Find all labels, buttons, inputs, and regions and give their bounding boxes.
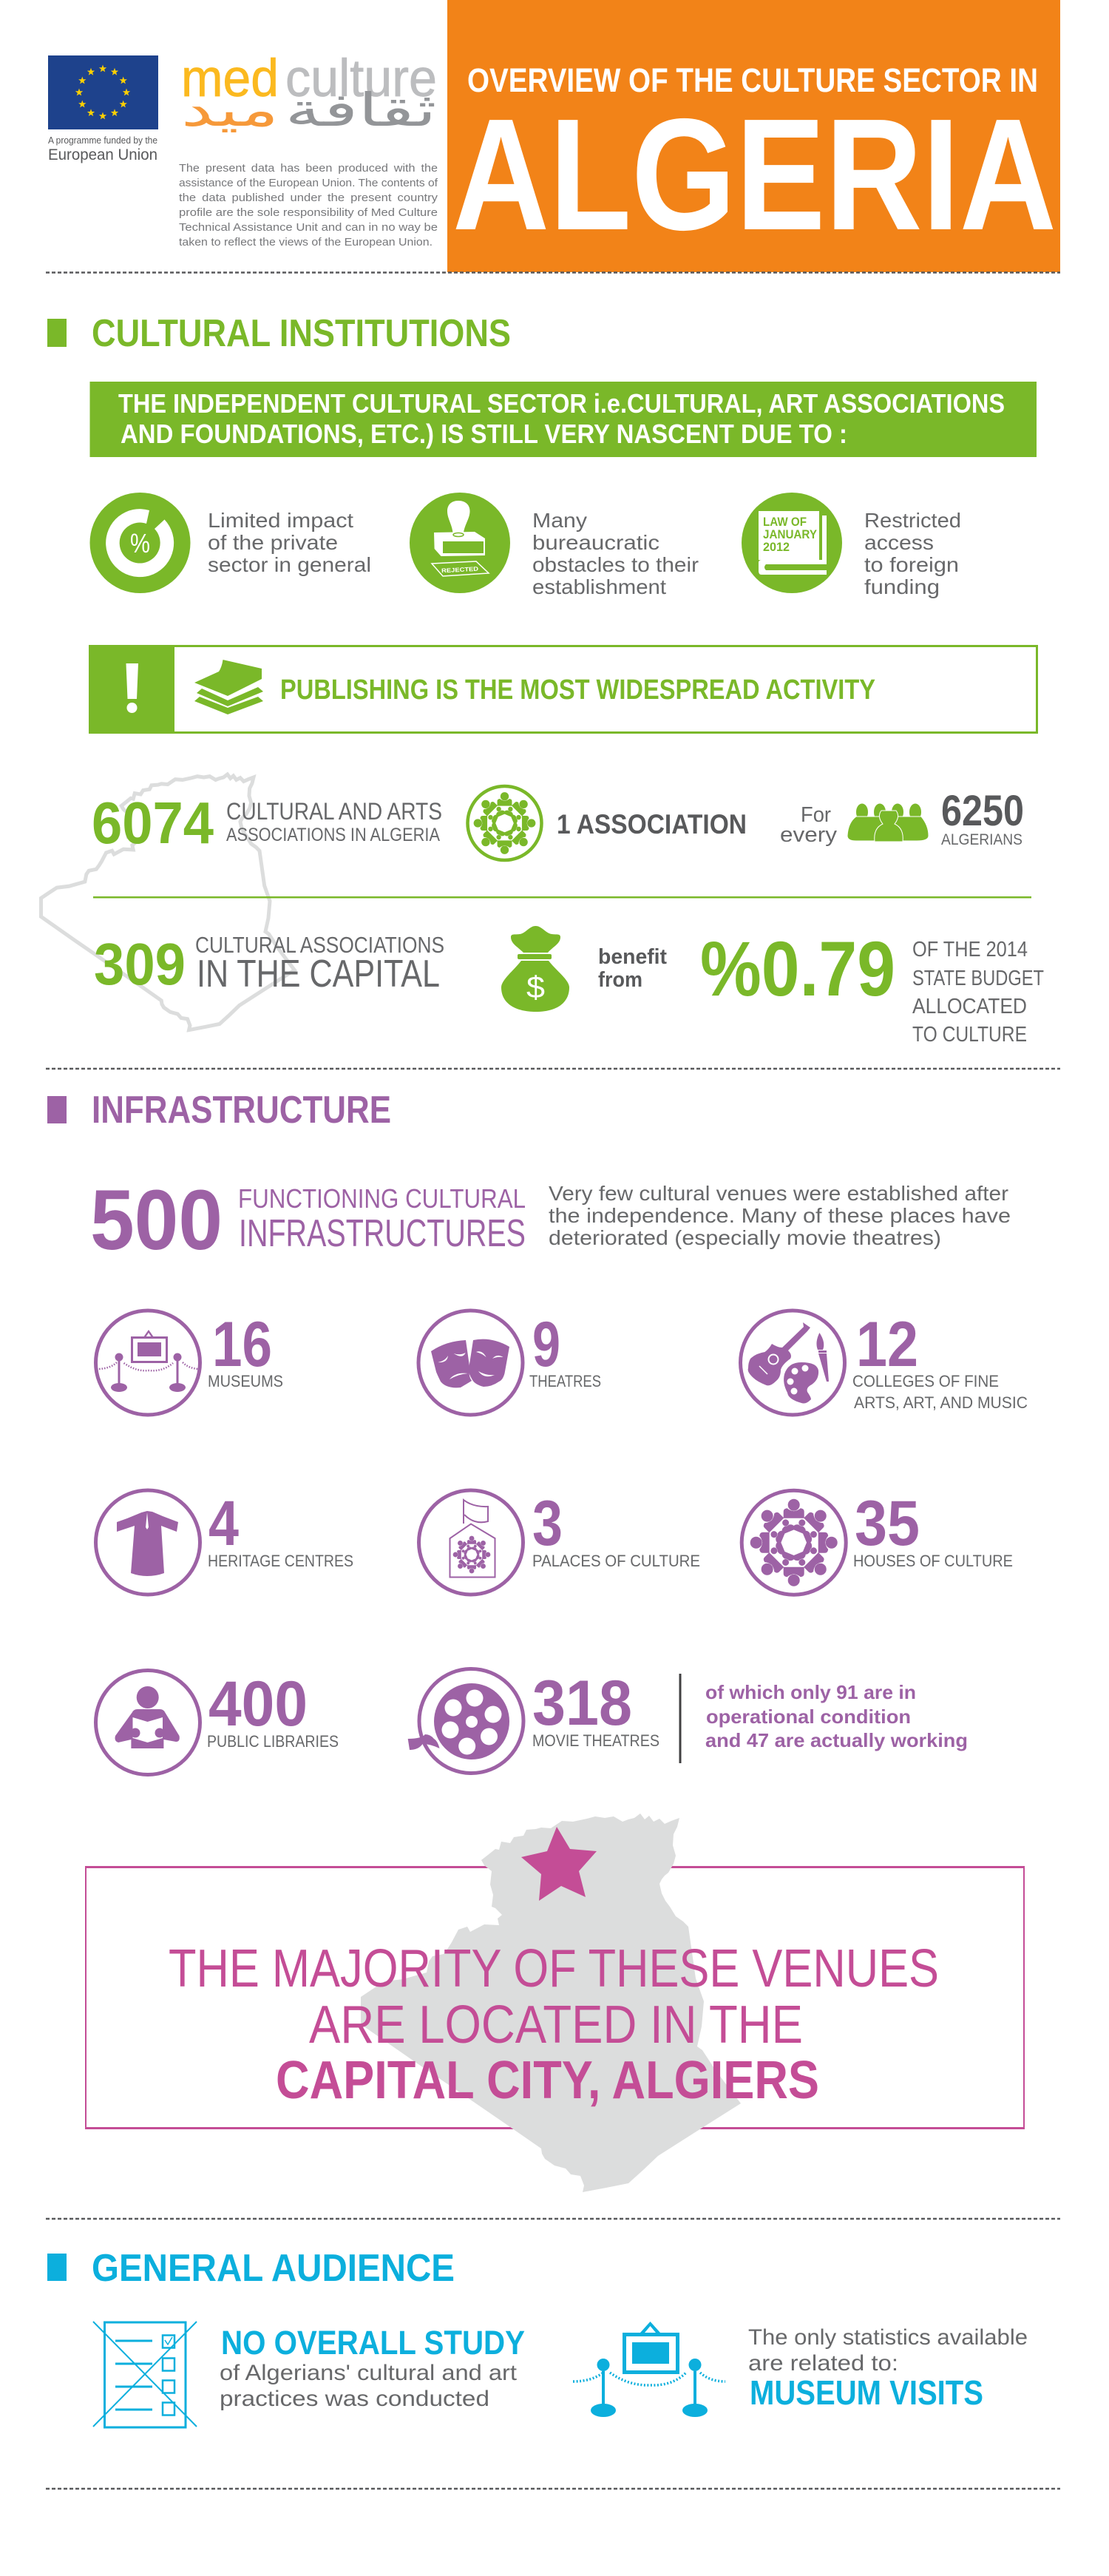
- text: restricted access: [864, 509, 961, 598]
- text: few venues: deteriorated (especially movie theatres): [549, 1226, 941, 1249]
- icon: money bag: [501, 926, 569, 1012]
- text: museum visits: The only statistics available: [748, 2325, 1028, 2350]
- EU flag logo: European Union: [48, 146, 157, 163]
- disclaimer text: profile are the sole responsibility of Med Culture: [179, 207, 438, 219]
- item: public libraries: 400: [208, 1669, 308, 1740]
- callout text: CAPITAL CITY, ALGIERS: [276, 2051, 819, 2110]
- note: operational condition: of which only 91 are in: [705, 1681, 916, 1703]
- EU flag logo: A programme funded by the: [48, 135, 157, 146]
- callout: publishing: [89, 645, 1037, 734]
- item: heritage centres: HERITAGE CENTRES: [208, 1552, 353, 1570]
- stat: for every: every: [780, 823, 838, 847]
- stat: 500 infrastructures: [90, 1173, 526, 1268]
- text: state budget: TO CULTURE: [912, 1023, 1027, 1047]
- icon: donut percent: %: [130, 528, 150, 558]
- Med Culture logo: culture: [285, 50, 437, 108]
- callout text: ARE LOCATED IN THE: [309, 1995, 803, 2055]
- section heading: INFRASTRUCTURE: [92, 1089, 391, 1132]
- disclaimer text: assistance of the European Union. The contents of: [179, 178, 438, 189]
- icon: law book: 2012: [763, 540, 790, 554]
- icon: guitar and palette: [741, 1311, 844, 1415]
- text: few venues: Very few cultural venues were established after: [549, 1182, 1008, 1205]
- text: state budget: STATE BUDGET: [912, 967, 1044, 990]
- item: heritage centres: [96, 1488, 353, 1595]
- stat: 6074 associations: CULTURAL AND ARTS: [226, 798, 442, 825]
- disclaimer text: the data published under the present country: [179, 192, 438, 204]
- text: state budget: OF THE 2014: [912, 938, 1028, 961]
- item: theatres: 9: [532, 1309, 560, 1380]
- section: cultural institutions: [47, 312, 1044, 1047]
- text: bureaucratic obstacles: Many: [532, 509, 587, 532]
- stat: 500 infrastructures: 500: [90, 1173, 223, 1268]
- stat: 6074 associations: 6074: [92, 790, 214, 856]
- text: no overall study: [220, 2324, 525, 2411]
- item: colleges: COLLEGES OF FINE: [852, 1372, 999, 1390]
- Med Culture logo: ميد: [181, 83, 279, 137]
- text: no overall study: NO OVERALL STUDY: [221, 2324, 525, 2362]
- stat: 309 in capital: [94, 931, 444, 997]
- item: colleges: [741, 1309, 1028, 1415]
- icon: rejected stamp: [410, 493, 510, 593]
- item: palaces of culture: 3: [532, 1488, 563, 1559]
- text: benefit from: [598, 945, 667, 992]
- text: few venues: [549, 1182, 1011, 1249]
- icon: film reel: [408, 1669, 523, 1774]
- icon: donut percent: [90, 493, 191, 593]
- section heading: CULTURAL INSTITUTIONS: [92, 312, 511, 355]
- icon: museum: [96, 1311, 200, 1415]
- callout text: [169, 1939, 939, 2110]
- item: public libraries: PUBLIC LIBRARIES: [207, 1732, 339, 1751]
- text: few venues: the independence. Many of these places have: [549, 1204, 1011, 1227]
- EU flag logo: [48, 55, 158, 163]
- text: bureaucratic obstacles: [532, 509, 699, 598]
- Med Culture logo: [181, 50, 437, 137]
- item: houses of culture: [742, 1488, 1013, 1595]
- text: limited impact: sector in general: [208, 553, 371, 576]
- stat: 500 infrastructures: INFRASTRUCTURES: [239, 1212, 526, 1255]
- text: museum visits: MUSEUM VISITS: [750, 2373, 983, 2412]
- item: museums: [96, 1309, 283, 1415]
- note: operational condition: operational condition: [706, 1705, 911, 1728]
- item: movie theatres: MOVIE THEATRES: [532, 1731, 659, 1750]
- text: bureaucratic obstacles: obstacles to their: [532, 553, 699, 576]
- item: movie theatres: [408, 1668, 968, 1774]
- text: museum visits: [748, 2325, 1028, 2412]
- panel: majority in capital: [85, 1813, 1025, 2192]
- section heading: GENERAL AUDIENCE: [92, 2247, 455, 2290]
- text: bureaucratic obstacles: establishment: [532, 575, 666, 598]
- item: palaces of culture: [418, 1488, 700, 1595]
- icon: rejected stamp: REJECTED: [441, 566, 479, 574]
- callout: publishing: PUBLISHING IS THE MOST WIDESPREAD ACTIVITY: [280, 675, 875, 706]
- item: colleges: ARTS, ART, AND MUSIC: [854, 1393, 1028, 1412]
- stat: 6074 associations: [92, 790, 442, 856]
- stat: 500 infrastructures: FUNCTIONING CULTURAL: [238, 1183, 526, 1214]
- icon: group of people: [847, 803, 929, 842]
- icon: exclamation mark: [126, 663, 138, 713]
- stat: for every: [780, 803, 838, 847]
- text: limited impact: of the private: [208, 531, 338, 554]
- icon: star: [521, 1827, 597, 1901]
- item: heritage centres: 4: [208, 1488, 239, 1559]
- disclaimer text: The present data has been produced with the: [179, 163, 438, 175]
- text: restricted access: to foreign: [864, 553, 959, 576]
- disclaimer text: [179, 163, 438, 249]
- text: museum visits: are related to:: [748, 2351, 898, 2376]
- text: restricted access: access: [864, 531, 934, 554]
- item: movie theatres: 318: [532, 1668, 632, 1739]
- stat: 6250 algerians: [941, 787, 1024, 848]
- text: no overall study: of Algerians' cultural and art: [220, 2361, 518, 2385]
- icon: money bag: $: [526, 970, 545, 1004]
- item: public libraries: [96, 1669, 339, 1775]
- stat: 6250 algerians: ALGERIANS: [941, 831, 1022, 848]
- orange title panel: [447, 0, 1060, 272]
- item: theatres: THEATRES: [529, 1372, 601, 1390]
- icon: palace: [418, 1490, 523, 1595]
- stat: 0.79 percent: %0.79: [700, 926, 895, 1013]
- icon: law book: [742, 493, 842, 593]
- icon: reader: [96, 1670, 200, 1775]
- text: limited impact: Limited impact: [208, 509, 353, 532]
- item: museums: MUSEUMS: [208, 1372, 283, 1390]
- section: infrastructure: [47, 1089, 1028, 2192]
- text: limited impact: [208, 509, 371, 576]
- text: no overall study: practices was conducted: [220, 2387, 489, 2411]
- icon: law book: JANUARY: [763, 527, 818, 541]
- disclaimer text: taken to reflect the views of the European Union.: [179, 237, 433, 249]
- map: Algeria: [361, 1813, 741, 2192]
- text: benefit from: from: [598, 968, 642, 992]
- item: museums: 16: [212, 1309, 272, 1380]
- icon: robe: [96, 1490, 200, 1595]
- note: operational condition: [705, 1681, 968, 1751]
- text: restricted access: Restricted: [864, 509, 961, 532]
- header: [48, 0, 1060, 272]
- text: state budget: ALLOCATED: [912, 995, 1027, 1018]
- item: houses of culture: 35: [855, 1488, 920, 1559]
- Med Culture logo: ثقافة: [285, 83, 436, 137]
- text: benefit from: benefit: [598, 945, 667, 969]
- text: restricted access: funding: [864, 575, 940, 598]
- icon: museum stanchions: [573, 2322, 725, 2417]
- green banner: AND FOUNDATIONS, ETC.) IS STILL VERY NASCENT DUE TO :: [121, 419, 847, 449]
- stat: 309 in capital: 309: [94, 931, 186, 997]
- item: houses of culture: HOUSES OF CULTURE: [853, 1552, 1013, 1570]
- stat: for every: For: [801, 803, 831, 827]
- note: operational condition: and 47 are actually working: [705, 1729, 968, 1751]
- green banner: [90, 382, 1037, 457]
- disclaimer text: Technical Assistance Unit and can in no way be: [179, 222, 438, 234]
- stat: 309 in capital: IN THE CAPITAL: [197, 953, 440, 995]
- map outline: Algeria behind statistics: [41, 774, 294, 1030]
- Med Culture logo: med: [181, 50, 279, 108]
- icon: law book: LAW OF: [763, 515, 807, 529]
- icon: stack of paper: [194, 660, 263, 714]
- item: theatres: [418, 1309, 601, 1415]
- green banner: THE INDEPENDENT CULTURAL SECTOR i.e.CULTURAL, ART ASSOCIATIONS: [118, 388, 1005, 419]
- item: palaces of culture: PALACES OF CULTURE: [532, 1552, 700, 1570]
- icon: crossed-out questionnaire: [93, 2322, 197, 2427]
- text: state budget: [912, 938, 1044, 1047]
- stat: 6250 algerians: 6250: [941, 787, 1024, 835]
- stat: 309 in capital: CULTURAL ASSOCIATIONS: [195, 932, 444, 958]
- callout text: THE MAJORITY OF THESE VENUES: [169, 1939, 939, 1998]
- stat: 1 association: 1 ASSOCIATION: [557, 809, 747, 839]
- section: general audience: [47, 2247, 1028, 2427]
- icon: theatre masks: [418, 1311, 523, 1415]
- stat: 6074 associations: ASSOCIATIONS IN ALGERIA: [226, 825, 440, 845]
- icon: people ring: [742, 1490, 846, 1595]
- item: colleges: 12: [856, 1309, 918, 1380]
- text: bureaucratic obstacles: bureaucratic: [532, 531, 659, 554]
- icon: association circle: [467, 786, 541, 860]
